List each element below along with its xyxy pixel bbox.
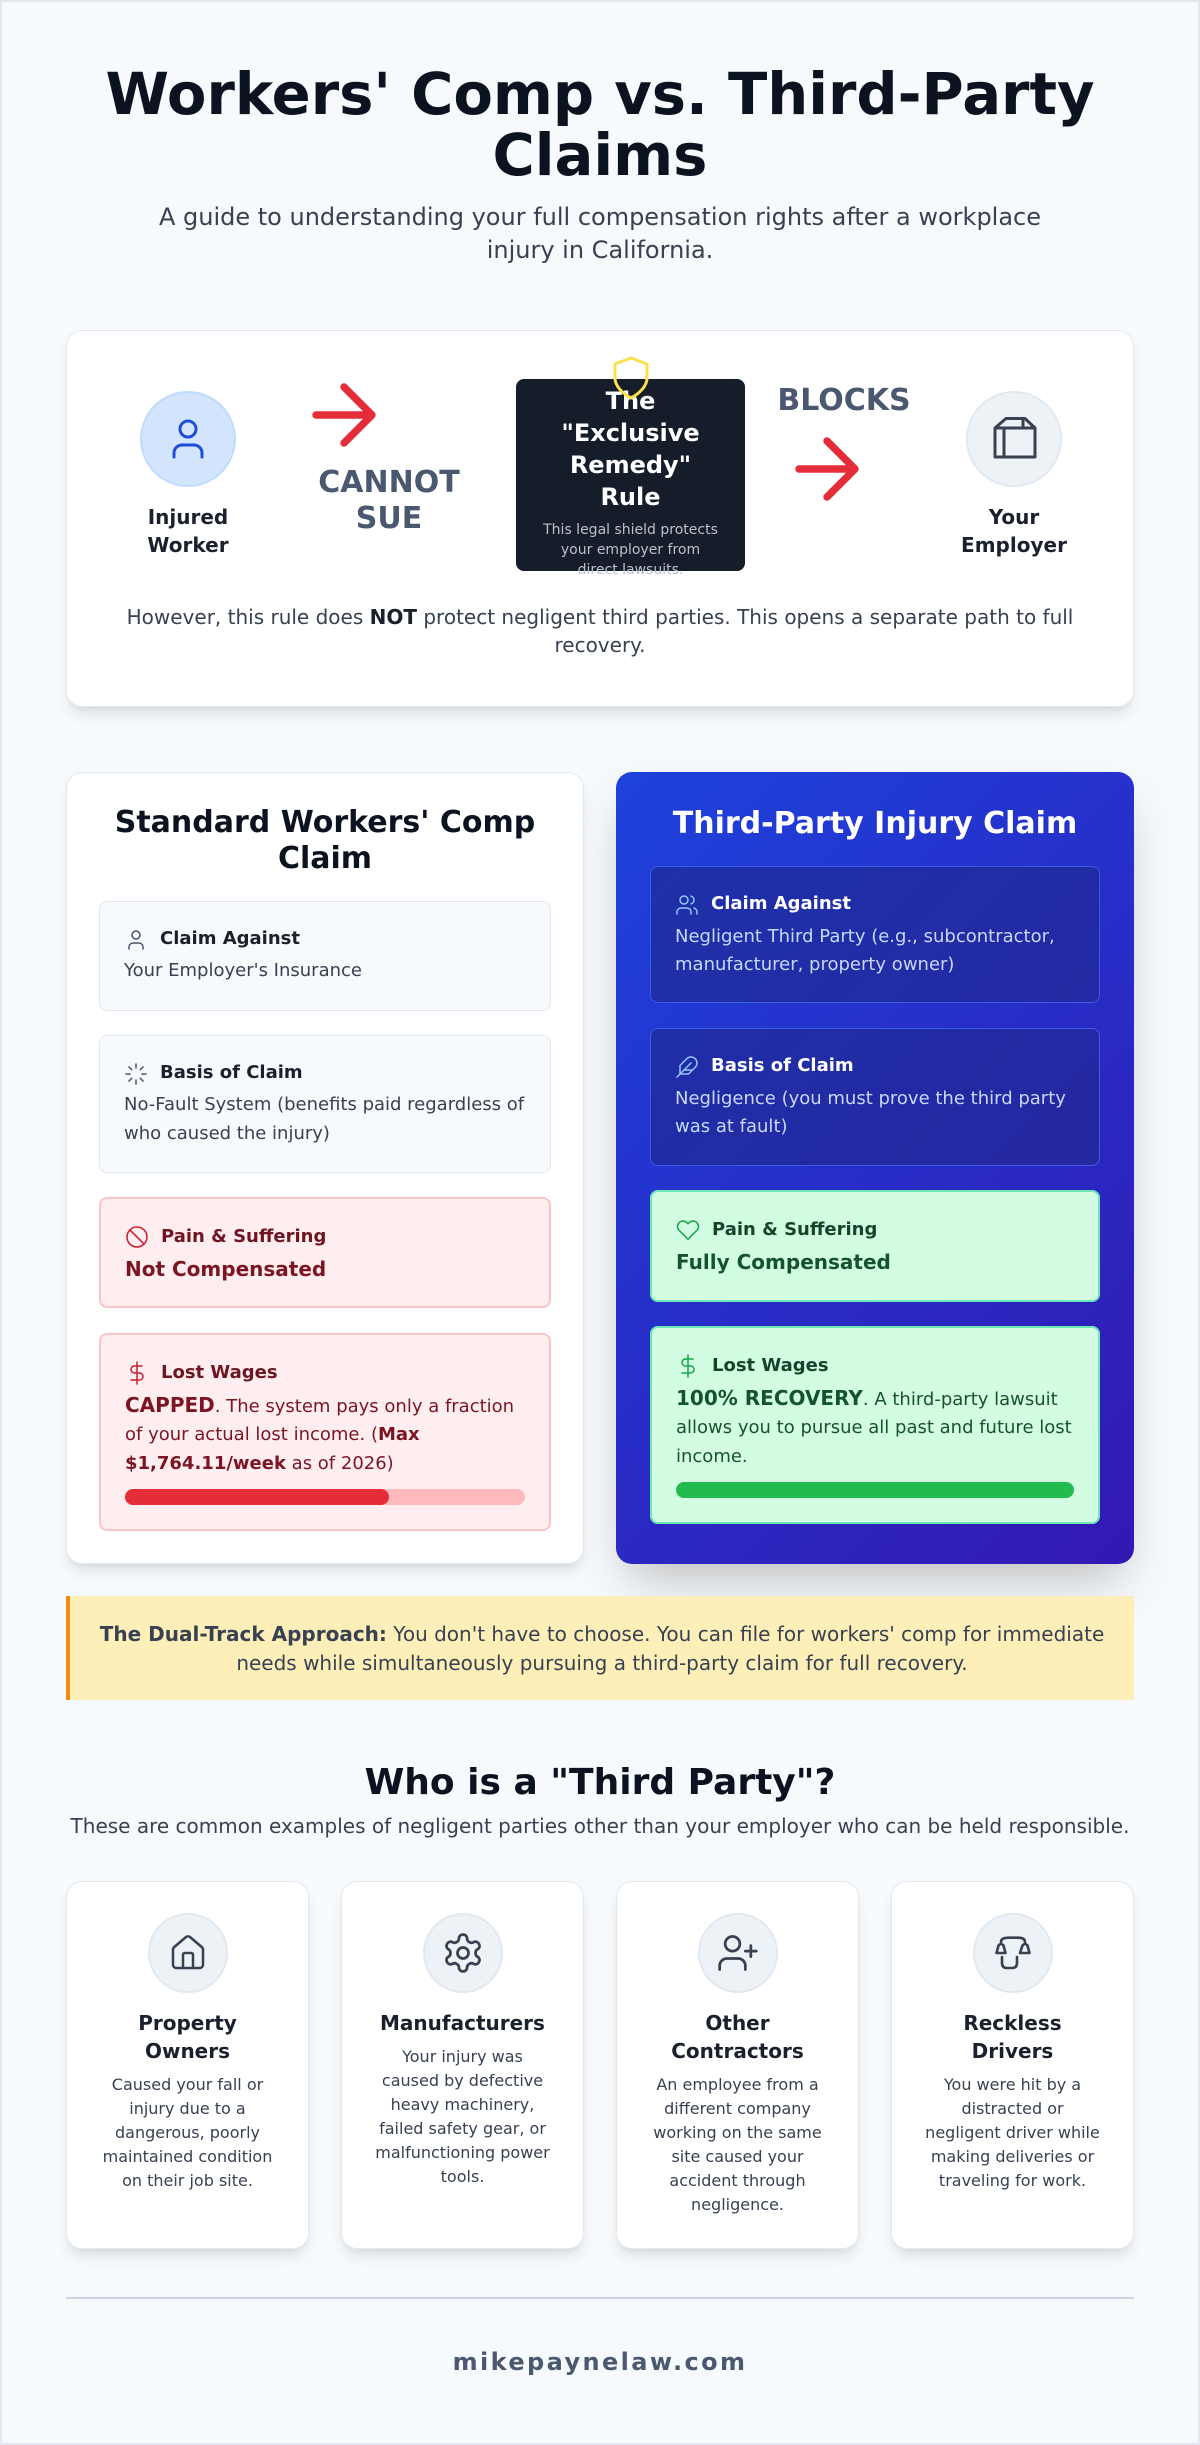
card title xyxy=(963,2011,1062,2063)
card title: Contractors xyxy=(671,2039,804,2063)
value: Not Compensated xyxy=(125,1257,326,1281)
text: rule description xyxy=(543,522,718,578)
label: Basis of Claim xyxy=(711,1055,854,1076)
card text: caused by defective xyxy=(382,2071,543,2090)
icon: worker circle xyxy=(140,391,236,487)
card text: negligent driver while xyxy=(925,2123,1100,2142)
row: pain and suffering xyxy=(650,1190,1100,1302)
icon: gear xyxy=(422,1913,502,1993)
label: Pain & Suffering xyxy=(712,1219,877,1240)
heading: third-party claim: Third-Party Injury Claim xyxy=(673,806,1077,841)
icon: dollar xyxy=(681,1354,695,1378)
card: other contractors xyxy=(616,1881,859,2249)
card text xyxy=(375,2047,550,2186)
node: injured worker xyxy=(140,391,236,557)
card text: You were hit by a xyxy=(944,2075,1081,2094)
card title: Manufacturers xyxy=(380,2011,545,2035)
icon: user plus xyxy=(698,1913,778,1993)
value: income. xyxy=(676,1446,748,1467)
text: rule exception xyxy=(127,605,1073,657)
card text: maintained condition xyxy=(103,2147,272,2166)
card text: tools. xyxy=(441,2167,484,2186)
icon: users xyxy=(676,895,698,915)
icon: user xyxy=(128,930,144,950)
row: claim against xyxy=(650,866,1100,1003)
label: injured worker: Worker xyxy=(147,533,229,557)
label: Claim Against xyxy=(711,893,851,914)
callout: dual-track approach xyxy=(66,1596,1134,1700)
subtitle: injury in California. xyxy=(487,236,713,264)
card: reckless drivers xyxy=(891,1881,1134,2249)
value: Negligence (you must prove the third party xyxy=(675,1088,1066,1109)
subtitle xyxy=(159,203,1041,264)
card text: dangerous, poorly xyxy=(115,2123,260,2142)
heading: who is a third party: Who is a "Third Party"? xyxy=(365,1762,835,1803)
card title xyxy=(138,2011,237,2063)
value: $1,764.11/week as of 2026) xyxy=(125,1453,394,1474)
card title: Reckless xyxy=(963,2011,1062,2035)
value: who caused the injury) xyxy=(124,1123,330,1144)
heading: standard claim: Claim xyxy=(278,841,372,876)
title: Claims xyxy=(493,122,707,188)
card text: on their job site. xyxy=(122,2171,253,2190)
label: Pain & Suffering xyxy=(161,1226,326,1247)
title xyxy=(105,61,1095,188)
icon: heart xyxy=(676,1220,700,1240)
panel: exclusive remedy rule shield xyxy=(516,379,745,571)
label: injured worker: Injured xyxy=(148,505,228,529)
arrow: cannot sue xyxy=(312,383,376,447)
label: Claim Against xyxy=(160,928,300,949)
value xyxy=(125,1393,514,1474)
card text: malfunctioning power xyxy=(375,2143,550,2162)
row: pain and suffering xyxy=(99,1197,551,1308)
row: basis of claim xyxy=(99,1035,551,1173)
card title: Drivers xyxy=(972,2039,1053,2063)
bar chart: full recovery xyxy=(676,1482,1074,1498)
icon: steering wheel xyxy=(972,1913,1052,1993)
text: rule description: This legal shield protects xyxy=(543,522,718,538)
card text: traveling for work. xyxy=(939,2171,1086,2190)
card text: injury due to a xyxy=(129,2099,246,2118)
card text: different company xyxy=(664,2099,811,2118)
heading: standard claim: Standard Workers' Comp xyxy=(115,805,535,840)
text: third party intro: These are common examples of negligent parties other than your employer who can be held responsible. xyxy=(71,1814,1129,1838)
icon: loader xyxy=(125,1063,147,1085)
value xyxy=(675,1088,1066,1137)
icon: dollar xyxy=(130,1361,144,1385)
label: your employer: Your xyxy=(989,505,1039,529)
callout: dual-track approach: needs while simultaneously pursuing a third-party claim for full recovery. xyxy=(236,1651,968,1675)
row: basis of claim xyxy=(650,1028,1100,1166)
arrow: blocks xyxy=(795,437,859,501)
value: Fully Compensated xyxy=(676,1250,891,1274)
card text: Your injury was xyxy=(402,2047,523,2066)
card text: heavy machinery, xyxy=(391,2095,534,2114)
label: your employer: Employer xyxy=(961,533,1067,557)
callout: dual-track approach: The Dual-Track Approach: You don't have to choose. You can file for workers' comp for immediate xyxy=(100,1622,1104,1646)
value xyxy=(675,926,1055,975)
card text: working on the same xyxy=(653,2123,822,2142)
card title: Property xyxy=(138,2011,237,2035)
value: Negligent Third Party (e.g., subcontractor, xyxy=(675,926,1055,947)
panel: exclusive remedy xyxy=(66,330,1134,707)
card text: site caused your xyxy=(671,2147,804,2166)
card text: negligence. xyxy=(691,2195,784,2214)
icon: house xyxy=(148,1913,228,1993)
card text: making deliveries or xyxy=(931,2147,1094,2166)
card text: An employee from a xyxy=(656,2075,819,2094)
text: rule exception: However, this rule does NOT protect negligent third parties. This opens a separate path to full xyxy=(127,605,1073,629)
label: your employer xyxy=(961,505,1067,557)
icon: feather xyxy=(676,1056,698,1078)
row: claim against xyxy=(99,901,551,1011)
panel: third-party injury claim xyxy=(616,772,1134,1564)
value: allows you to pursue all past and future lost xyxy=(676,1417,1072,1438)
value: No-Fault System (benefits paid regardless of xyxy=(124,1094,524,1115)
icon: building box xyxy=(994,417,1036,458)
bar fill xyxy=(125,1489,389,1505)
value xyxy=(124,1094,524,1144)
heading: rule name: Rule xyxy=(600,483,661,511)
label: Lost Wages xyxy=(161,1362,278,1383)
card text xyxy=(925,2075,1100,2190)
heading: standard claim xyxy=(115,805,535,876)
icon: shield xyxy=(614,356,648,400)
card: property owners xyxy=(66,1881,309,2249)
card title xyxy=(671,2011,804,2063)
bar chart: capped recovery xyxy=(125,1489,525,1505)
subtitle: A guide to understanding your full compensation rights after a workplace xyxy=(159,203,1041,231)
text: rule description: your employer from xyxy=(561,542,700,558)
title: Workers' Comp vs. Third-Party xyxy=(105,61,1095,128)
card: manufacturers xyxy=(341,1881,584,2249)
value: was at fault) xyxy=(675,1116,788,1137)
footer: mikepaynelaw.com xyxy=(453,2348,747,2376)
label: cannot sue: CANNOT xyxy=(318,465,460,500)
icon: employer circle xyxy=(966,391,1062,487)
value: CAPPED. The system pays only a fraction xyxy=(125,1393,514,1417)
text: rule exception: recovery. xyxy=(554,633,646,657)
row: lost wages xyxy=(99,1333,551,1531)
panel: standard workers' comp claim xyxy=(66,772,584,1564)
text: rule description: direct lawsuits. xyxy=(578,562,683,578)
card text xyxy=(653,2075,822,2214)
label: cannot sue: SUE xyxy=(356,501,422,536)
heading: rule name: The xyxy=(606,387,655,415)
heading: rule name: "Exclusive xyxy=(561,419,700,447)
value xyxy=(676,1386,1072,1467)
icon: ban xyxy=(126,1226,148,1248)
label: Basis of Claim xyxy=(160,1062,303,1083)
label: injured worker xyxy=(147,505,229,557)
heading: rule name: Remedy" xyxy=(570,451,691,479)
icon: person xyxy=(172,420,204,458)
card text: accident through xyxy=(669,2171,806,2190)
value: Your Employer's Insurance xyxy=(124,960,362,981)
node: employer xyxy=(961,391,1067,557)
card text: failed safety gear, or xyxy=(379,2119,546,2138)
label: Lost Wages xyxy=(712,1355,829,1376)
heading: rule name xyxy=(561,387,700,511)
card title: Other xyxy=(705,2011,770,2035)
label: blocks: BLOCKS xyxy=(777,383,911,418)
card title: Owners xyxy=(145,2039,230,2063)
value: of your actual lost income. (Max xyxy=(125,1424,420,1445)
label: cannot sue xyxy=(318,465,460,536)
value: manufacturer, property owner) xyxy=(675,954,954,975)
card text: Caused your fall or xyxy=(112,2075,263,2094)
card text: distracted or xyxy=(961,2099,1064,2118)
value: 100% RECOVERY. A third-party lawsuit xyxy=(676,1386,1058,1410)
row: lost wages xyxy=(650,1326,1100,1524)
card text xyxy=(103,2075,272,2190)
